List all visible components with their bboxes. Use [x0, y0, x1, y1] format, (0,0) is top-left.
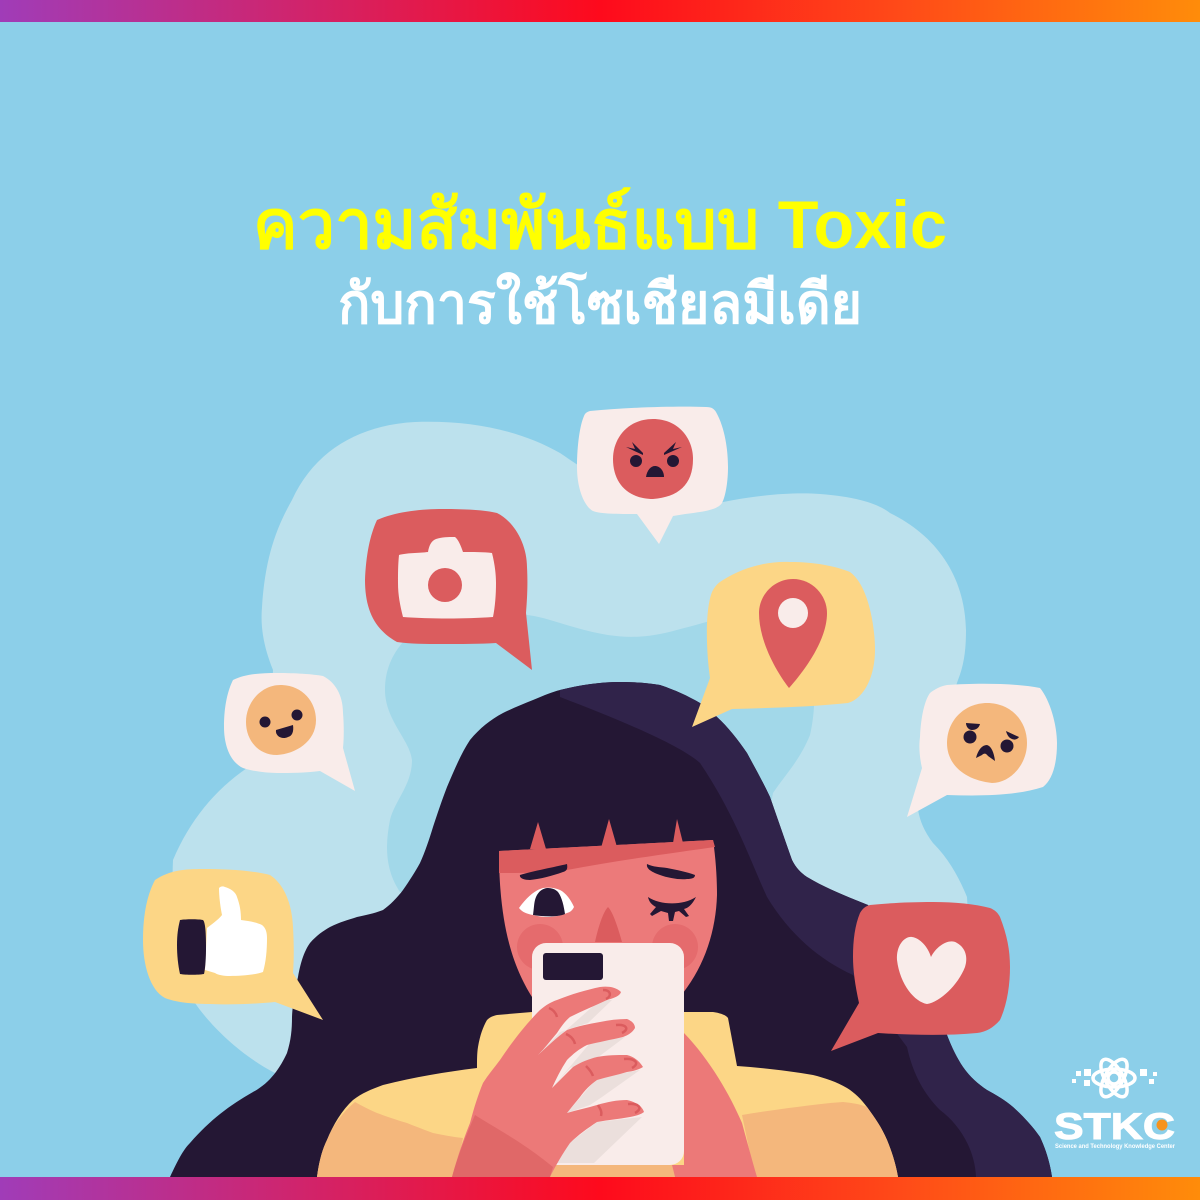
bubble: location pin: [692, 562, 875, 727]
bubble: heart: [831, 902, 1010, 1051]
icon: camera: [398, 537, 496, 618]
cheeks: [517, 924, 563, 970]
logo: STKC: [1054, 1055, 1176, 1150]
icon: heart: [897, 937, 966, 1004]
logo tagline: Science and Technology Knowledge Center: [1055, 1144, 1176, 1150]
title: กับการใช้โซเชียลมีเดีย: [338, 271, 862, 335]
hand: [452, 987, 644, 1177]
jacket shade: [317, 1102, 898, 1177]
open eye: [519, 888, 574, 917]
character: woman using phone: [170, 682, 1052, 1177]
hair highlight: [560, 682, 1052, 1177]
logo wordmark: STKC: [1054, 1106, 1175, 1147]
far arm: [672, 1033, 757, 1177]
bubble: sad face: [907, 684, 1057, 817]
face: [499, 840, 717, 1020]
title: ความสัมพันธ์แบบ Toxic: [253, 187, 947, 263]
bangs tips: [530, 819, 683, 849]
bottom gradient bar: [0, 1177, 1200, 1200]
icon: sad face: [947, 703, 1027, 783]
hair: [170, 682, 1052, 1177]
wrist shade: [452, 1115, 553, 1177]
icon: map pin: [759, 579, 827, 688]
eyebrows: [520, 864, 695, 880]
title: [253, 187, 947, 335]
bubble: angry face: [577, 407, 728, 544]
icon: angry face: [613, 419, 693, 499]
bubble: camera: [365, 509, 532, 670]
jacket: [317, 1012, 898, 1177]
icon: atom: [1093, 1055, 1135, 1101]
icon: thumbs up: [177, 886, 267, 976]
fingernails and knuckles: [549, 990, 639, 1116]
icon: happy face: [246, 685, 316, 755]
forehead shadow: [499, 840, 715, 873]
top gradient bar: [0, 0, 1200, 22]
bubble: happy face: [224, 673, 355, 791]
phone: [532, 943, 684, 1165]
pixel squares: [1072, 1069, 1157, 1086]
bubble: thumbs up: [143, 869, 323, 1020]
background blob: [172, 422, 970, 1073]
nose: [595, 907, 622, 942]
closed eye: [648, 897, 696, 921]
